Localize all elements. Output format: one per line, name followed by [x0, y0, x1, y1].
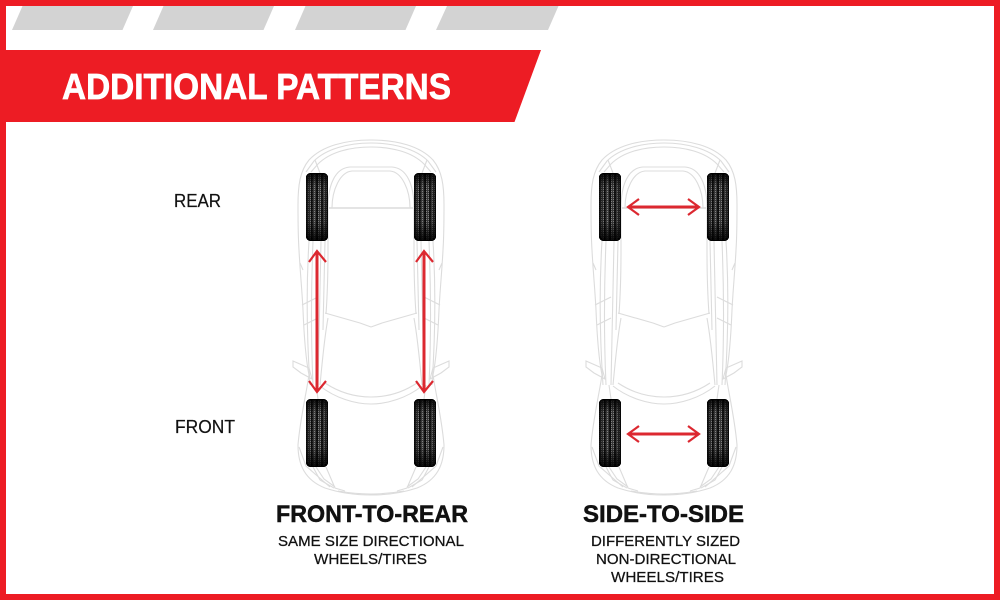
diagram: side-to-side [586, 140, 742, 495]
description: front-to-rear [278, 533, 464, 568]
rear label: REAR [174, 191, 221, 211]
arrow: left front-to-rear [309, 251, 326, 392]
arrow: front side-to-side [628, 426, 699, 442]
title: ADDITIONAL PATTERNS [62, 66, 451, 107]
title banner [0, 50, 541, 122]
front label: FRONT [175, 417, 235, 437]
arrow: rear side-to-side [628, 199, 699, 215]
arrow: right front-to-rear [416, 251, 433, 392]
description: front-to-rear: SAME SIZE DIRECTIONAL [278, 533, 464, 550]
heading: side-to-side: SIDE-TO-SIDE [583, 501, 744, 528]
description: side-to-side [591, 533, 740, 586]
description: side-to-side: WHEELS/TIRES [611, 569, 724, 586]
diagram: front-to-rear [293, 140, 449, 495]
decorative grey stripes [12, 6, 558, 30]
description: side-to-side: DIFFERENTLY SIZED [591, 533, 740, 550]
description: side-to-side: NON-DIRECTIONAL [596, 551, 736, 568]
description: front-to-rear: WHEELS/TIRES [314, 551, 427, 568]
heading: front-to-rear: FRONT-TO-REAR [276, 501, 468, 528]
